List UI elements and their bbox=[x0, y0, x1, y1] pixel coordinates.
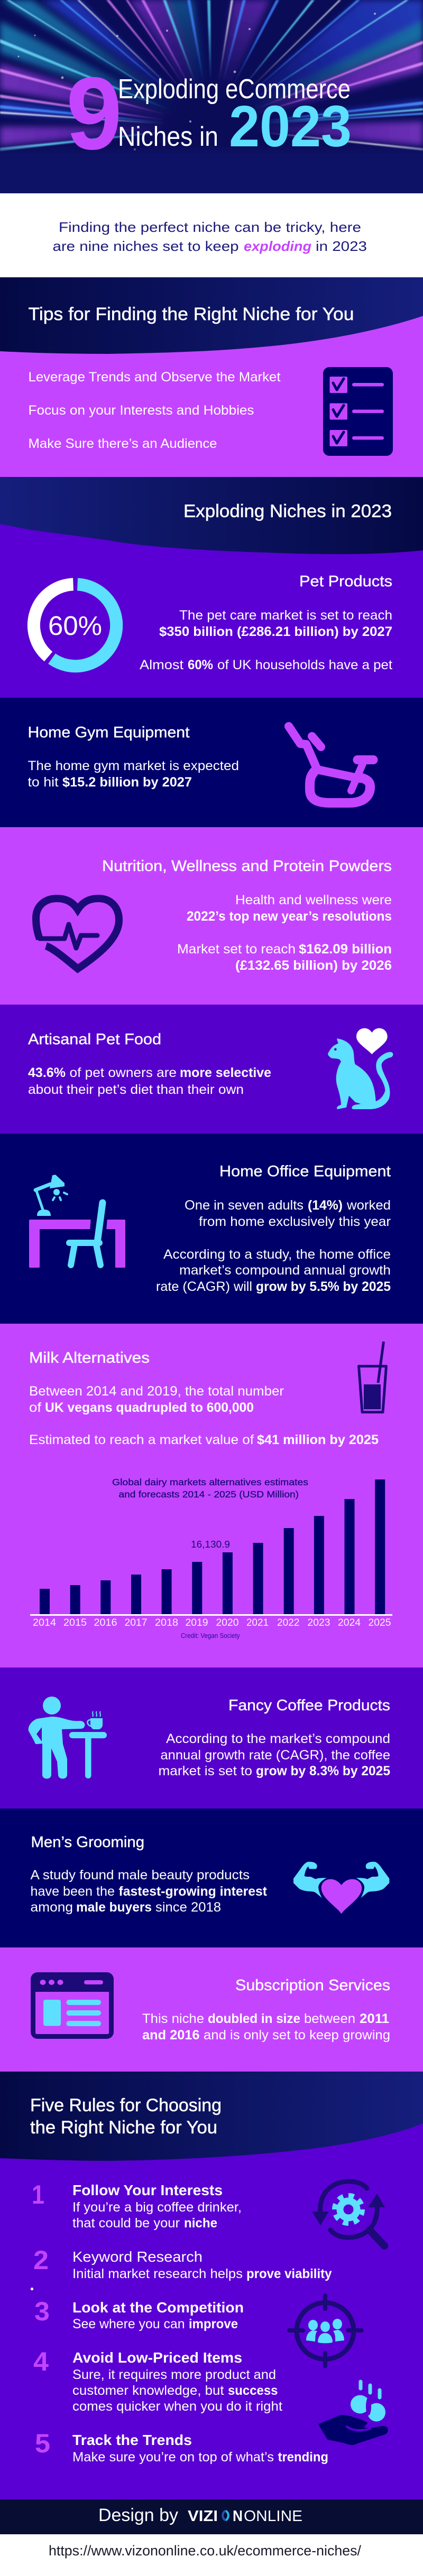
panel: home gym equipment bbox=[0, 698, 423, 827]
source URL: https://www.vizononline.co.uk/ecommerce-niches/ bbox=[49, 2543, 361, 2559]
rule 4: success bbox=[228, 2383, 278, 2398]
bars bbox=[40, 1479, 385, 1614]
panel: milk alternatives bbox=[0, 1324, 423, 1668]
rule 5: Track the Trends bbox=[72, 2432, 192, 2448]
heading: exploding niches: Exploding Niches in 2023 bbox=[183, 501, 392, 521]
rule 3: Look at the Competition bbox=[72, 2299, 244, 2316]
title: 2023: 2023 bbox=[229, 94, 352, 159]
panel: fancy coffee products bbox=[0, 1668, 423, 1809]
rule 1: that could be your bbox=[72, 2216, 180, 2231]
text: male beauty products: male buyers bbox=[76, 1900, 152, 1915]
rule 2: Keyword Research bbox=[72, 2249, 203, 2265]
text: UK households bbox=[140, 658, 392, 672]
text: home gym market: The home gym market is expected bbox=[27, 758, 239, 773]
panel: nutrition, wellness and protein powders bbox=[0, 827, 423, 1005]
icon: desk, chair and lamp bbox=[29, 1175, 125, 1268]
heading: fancy coffee: Fancy Coffee Products bbox=[228, 1697, 390, 1714]
intro text bbox=[53, 219, 367, 254]
tip 3: Make Sure there’s an Audience bbox=[29, 436, 217, 451]
footer: design by: Design by bbox=[98, 2505, 178, 2525]
heading: artisanal: Artisanal Pet Food bbox=[28, 1031, 161, 1048]
heading: subscription services: Subscription Services bbox=[235, 1977, 390, 1994]
text: CAGR study: market’s compound annual growth bbox=[179, 1263, 391, 1278]
text: market value estimate bbox=[29, 1432, 379, 1447]
text: UK households: of UK households have a pet bbox=[217, 658, 392, 672]
tip 2: Focus on your Interests and Hobbies bbox=[29, 403, 254, 418]
icon: exercise bike bbox=[289, 726, 373, 803]
chart title: and forecasts 2014 - 2025 (USD Million) bbox=[118, 1489, 299, 1500]
chart title bbox=[112, 1477, 308, 1500]
panel: men's grooming bbox=[0, 1809, 423, 1947]
rule 1: Follow Your Interests bbox=[72, 2182, 223, 2198]
text: pet owners: more selective bbox=[180, 1065, 271, 1080]
text: CAGR study: According to a study, the home office bbox=[163, 1247, 391, 1262]
year labels: 2016 bbox=[94, 1617, 117, 1628]
text: male beauty products bbox=[31, 1868, 268, 1915]
text: coffee market growth bbox=[159, 1731, 390, 1778]
year labels: 2025 bbox=[368, 1617, 391, 1628]
text: market value: Market set to reach bbox=[177, 942, 296, 957]
intro text: exploding bbox=[244, 238, 311, 254]
text: UK vegans: of bbox=[29, 1400, 41, 1415]
text: health and wellness: 2022’s top new year’s resolutions bbox=[187, 909, 392, 924]
rule 4: comes quicker when you do it right bbox=[72, 2399, 282, 2414]
heading: five rules: the Right Niche for You bbox=[30, 2118, 217, 2138]
rule 3 bbox=[34, 2297, 244, 2331]
year labels: 2020 bbox=[216, 1617, 239, 1628]
panel: tips bbox=[0, 277, 423, 477]
icon: gear in magnifier bbox=[312, 2181, 385, 2246]
logo: Vizion Online: VIZI bbox=[188, 2508, 218, 2525]
year labels: 2024 bbox=[338, 1617, 361, 1628]
rule 4: Sure, it requires more product and bbox=[72, 2367, 276, 2382]
intro text: are nine niches set to keep bbox=[53, 238, 239, 254]
text: one in seven: worked bbox=[346, 1198, 391, 1213]
intro text: in 2023 bbox=[316, 238, 367, 254]
text: niche doubled: between bbox=[304, 2011, 355, 2026]
text: CAGR study: grow by 5.5% by 2025 bbox=[256, 1279, 391, 1294]
logo: Vizion Online bbox=[188, 2508, 302, 2525]
year labels: 2022 bbox=[277, 1617, 299, 1628]
title: Niches in: Niches in bbox=[118, 121, 218, 152]
text: male beauty products: A study found male beauty products bbox=[31, 1868, 250, 1882]
rule 3: See where you can bbox=[72, 2317, 185, 2331]
light ray burst background bbox=[0, 0, 423, 193]
text: one in seven: from home exclusively this year bbox=[199, 1214, 391, 1229]
rule 5: trending bbox=[278, 2450, 328, 2465]
panel: pet products bbox=[0, 477, 423, 698]
rule 3: improve bbox=[189, 2317, 238, 2331]
text: niche doubled: and is only set to keep growing bbox=[204, 2028, 390, 2043]
text: market value: (£132.65 billion) by 2026 bbox=[235, 958, 392, 973]
chart credit: Credit: Vegan Society bbox=[181, 1632, 240, 1640]
heading: men's grooming: Men’s Grooming bbox=[31, 1834, 144, 1851]
rule 1: 1 bbox=[32, 2180, 44, 2209]
icon: checklist bbox=[323, 367, 393, 456]
text: UK households: 60% bbox=[188, 658, 213, 672]
footer: design by bbox=[0, 2499, 423, 2534]
year labels: 2015 bbox=[63, 1617, 87, 1628]
tip 1: Leverage Trends and Observe the Market bbox=[29, 370, 281, 385]
text: niche doubled: This niche bbox=[142, 2011, 204, 2026]
year labels: 2018 bbox=[155, 1617, 178, 1628]
heading: milk alternatives: Milk Alternatives bbox=[29, 1350, 150, 1366]
text: UK households: Almost bbox=[140, 658, 183, 672]
rule 5 bbox=[35, 2429, 328, 2465]
text: pet owners: 43.6% bbox=[28, 1065, 66, 1080]
rule 2: prove viability bbox=[246, 2266, 332, 2281]
icon: audience target bbox=[289, 2296, 362, 2366]
heading: five rules: Five Rules for Choosing bbox=[30, 2095, 222, 2115]
rule 5: 5 bbox=[35, 2429, 50, 2458]
heading: home gym: Home Gym Equipment bbox=[27, 724, 189, 741]
text: home gym market: $15.2 billion by 2027 bbox=[62, 775, 192, 790]
text: health and wellness bbox=[187, 893, 392, 924]
text: pet owners: about their pet’s diet than their own bbox=[28, 1082, 244, 1097]
icon: browser window bbox=[31, 1972, 114, 2039]
icon: hand with coins bbox=[319, 2382, 388, 2444]
text: home gym market bbox=[27, 758, 239, 790]
year labels: 2014 bbox=[33, 1617, 56, 1628]
text: pet care market: The pet care market is set to reach bbox=[179, 608, 392, 623]
title: big 9: 9 bbox=[66, 56, 122, 171]
hero banner bbox=[0, 0, 423, 193]
text: one in seven bbox=[185, 1198, 391, 1229]
rule 2: 2 bbox=[33, 2245, 49, 2275]
icon: glass with straw bbox=[358, 1342, 386, 1412]
rule 2: Initial market research helps bbox=[72, 2266, 243, 2281]
text: health and wellness: Health and wellness were bbox=[235, 893, 392, 907]
text: coffee market growth: grow by 8.3% by 2025 bbox=[256, 1764, 390, 1778]
text: male beauty products: among bbox=[31, 1900, 73, 1915]
text: pet owners: of pet owners are bbox=[70, 1065, 177, 1080]
text: pet care market: $350 billion (£286.21 billion) by 2027 bbox=[159, 624, 392, 639]
text: home gym market: to hit bbox=[27, 775, 59, 790]
year labels: 2021 bbox=[246, 1617, 269, 1628]
icon: flexing arms with heart bbox=[293, 1862, 389, 1914]
text: pet owners bbox=[28, 1065, 271, 1097]
bar chart: global dairy alternatives bbox=[30, 1477, 392, 1640]
rule 4: 4 bbox=[33, 2347, 49, 2376]
text: male beauty products: since 2018 bbox=[155, 1900, 221, 1915]
text: coffee market growth: market is set to bbox=[159, 1764, 252, 1778]
year labels: 2023 bbox=[308, 1617, 330, 1628]
text: niche doubled: doubled in size bbox=[208, 2011, 300, 2026]
panel: home office equipment bbox=[0, 1134, 423, 1324]
heading: tips: Tips for Finding the Right Niche for You bbox=[29, 304, 354, 324]
heading: nutrition: Nutrition, Wellness and Protein Powders bbox=[102, 858, 392, 875]
text: niche doubled: 2011 bbox=[360, 2011, 389, 2026]
rule 4: Avoid Low-Priced Items bbox=[72, 2349, 242, 2366]
text: niche doubled: and 2016 bbox=[142, 2028, 200, 2043]
icon: cat with heart bbox=[328, 1028, 393, 1109]
title: Exploding eCommerce: Exploding eCommerce bbox=[118, 74, 351, 105]
heading: home office: Home Office Equipment bbox=[219, 1163, 391, 1180]
text: CAGR study bbox=[156, 1247, 391, 1294]
heading: five rules bbox=[30, 2095, 222, 2138]
rule 2 bbox=[33, 2245, 332, 2281]
text: one in seven: (14%) bbox=[308, 1198, 343, 1213]
text: coffee market growth: According to the market’s compound bbox=[166, 1731, 390, 1746]
text: one in seven: One in seven adults bbox=[185, 1198, 304, 1213]
text: UK vegans bbox=[29, 1384, 284, 1415]
text: market value estimate: Estimated to reach a market value of bbox=[29, 1432, 254, 1447]
text: market value estimate: $41 million by 2025 bbox=[257, 1432, 379, 1447]
heading: pet products: Pet Products bbox=[299, 573, 392, 590]
text: market value: $162.09 billion bbox=[299, 942, 392, 957]
year labels: 2017 bbox=[125, 1617, 147, 1628]
donut chart: 60% bbox=[34, 584, 116, 666]
stray dot bbox=[31, 2288, 33, 2290]
text: male beauty products: fastest-growing interest bbox=[118, 1884, 268, 1899]
rule 3: 3 bbox=[34, 2297, 50, 2326]
text: market value bbox=[177, 942, 392, 973]
panel: subscription services bbox=[0, 1947, 423, 2072]
rule 5: Make sure you’re on top of what’s bbox=[72, 2450, 274, 2465]
text: niche doubled bbox=[142, 2011, 390, 2043]
icon: person with coffee bbox=[29, 1697, 107, 1779]
rule 1: If you’re a big coffee drinker, bbox=[72, 2200, 242, 2215]
text: UK vegans: UK vegans quadrupled to 600,000 bbox=[45, 1400, 254, 1415]
chart title: Global dairy markets alternatives estimates bbox=[112, 1477, 308, 1487]
rule 4: customer knowledge, but bbox=[72, 2383, 224, 2398]
text: pet care market bbox=[159, 608, 392, 639]
logo: Vizion Online: N bbox=[233, 2508, 243, 2525]
panel: artisanal pet food bbox=[0, 1005, 423, 1134]
year labels: 2019 bbox=[185, 1617, 208, 1628]
year labels bbox=[33, 1617, 391, 1628]
donut chart: 60%: 60% bbox=[48, 611, 102, 641]
text: coffee market growth: annual growth rate (CAGR), the coffee bbox=[161, 1748, 390, 1763]
logo: Vizion Online: ONLINE bbox=[244, 2508, 302, 2525]
icon: heart with pulse bbox=[36, 898, 119, 969]
panel: five rules bbox=[0, 2072, 423, 2499]
text: UK vegans: Between 2014 and 2019, the total number bbox=[29, 1384, 284, 1399]
rule 1 bbox=[32, 2180, 242, 2231]
rule 4 bbox=[33, 2347, 282, 2414]
intro text: Finding the perfect niche can be tricky, here bbox=[59, 219, 361, 235]
rule 1: niche bbox=[184, 2216, 217, 2231]
text: male beauty products: have been the bbox=[31, 1884, 115, 1899]
text: CAGR study: rate (CAGR) will bbox=[156, 1279, 252, 1294]
data label: 16,130.9 bbox=[191, 1539, 230, 1550]
